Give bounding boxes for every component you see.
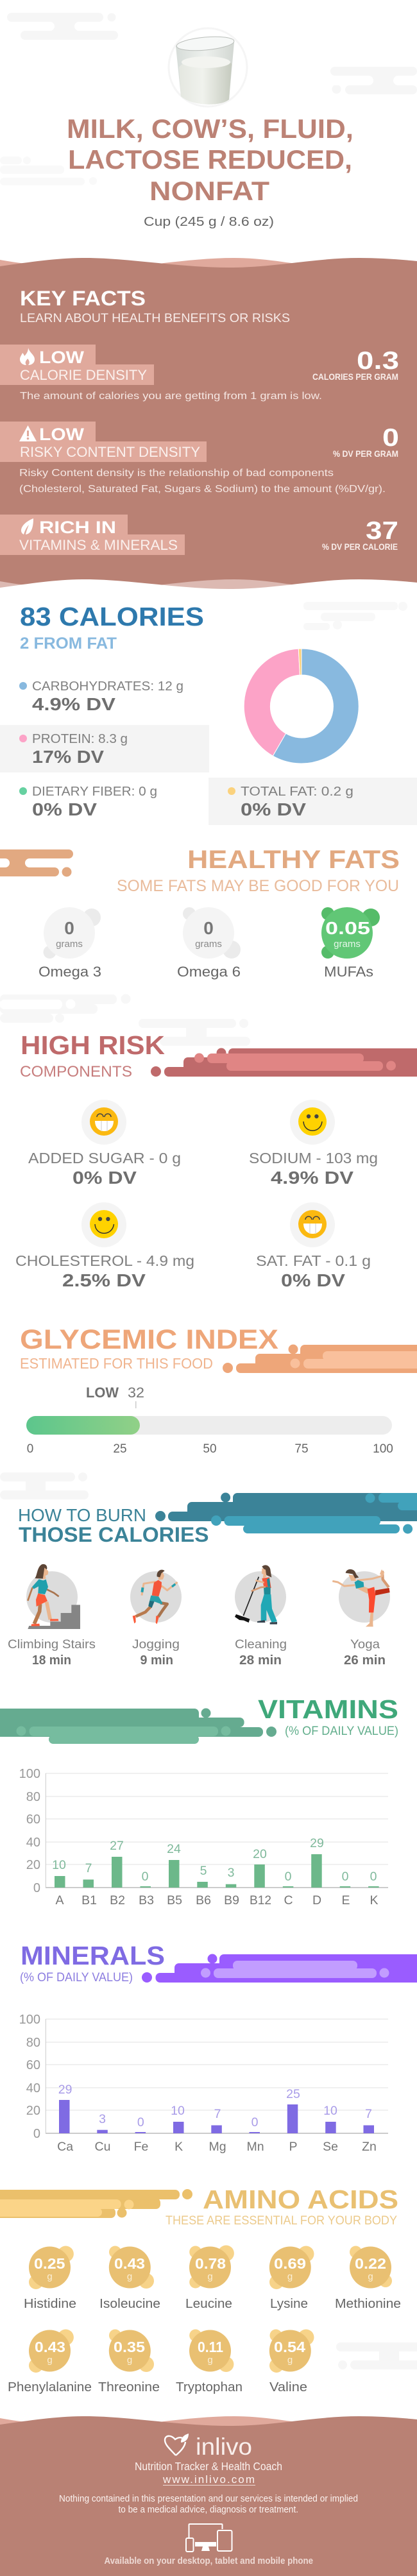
amino acid: valine: g xyxy=(287,2355,293,2366)
panel: calories xyxy=(0,602,417,825)
amino acid: isoleucine: g xyxy=(127,2271,132,2282)
heading: those calories: THOSE CALORIES xyxy=(19,1523,209,1546)
bar chart: minerals: Se xyxy=(323,2140,338,2154)
bar chart: minerals: 0 xyxy=(33,2127,40,2141)
panel: minerals xyxy=(19,1941,417,2154)
amino acid: lysine: 0.69 xyxy=(274,2255,306,2272)
gauge scale: 50 xyxy=(203,1442,217,1456)
fact: calorie density: CALORIE DENSITY xyxy=(20,367,147,383)
bar chart: minerals: 100 xyxy=(19,2013,40,2027)
bubble: omega 6: 0 xyxy=(203,918,214,938)
bar chart: vitamins: B12 xyxy=(250,1893,271,1907)
footer xyxy=(0,2416,417,2576)
subheading: amino acids: THESE ARE ESSENTIAL FOR YOUR BODY xyxy=(166,2214,397,2228)
bar chart: minerals: Cu xyxy=(95,2140,110,2154)
bar chart: minerals: 3 xyxy=(99,2112,106,2126)
gauge scale xyxy=(27,1442,393,1456)
item: sodium: SODIUM - 103 mg xyxy=(249,1150,378,1166)
gauge scale: 25 xyxy=(113,1442,127,1456)
nutrient: dietary fiber xyxy=(19,785,157,819)
heading: vitamins: VITAMINS xyxy=(258,1694,398,1724)
donut chart xyxy=(244,649,359,763)
item: cholesterol: CHOLESTEROL - 4.9 mg xyxy=(15,1252,194,1269)
heading: calories: 83 CALORIES xyxy=(20,602,204,631)
bar chart: minerals: 0 xyxy=(251,2115,259,2129)
bubble: omega 3: 0 xyxy=(64,918,74,938)
activity labels: 26 min xyxy=(344,1653,386,1668)
item: cholesterol: 2.5% DV xyxy=(62,1270,146,1290)
amino acid: valine: 0.54 xyxy=(274,2339,305,2355)
fact: rich in vitamins xyxy=(0,515,398,555)
bar chart: vitamins: 27 xyxy=(110,1839,124,1853)
fact: calorie density: 0.3 xyxy=(357,347,399,375)
bar chart: minerals: Mn xyxy=(246,2140,264,2154)
background clouds xyxy=(0,994,250,1046)
activity labels: 9 min xyxy=(140,1653,173,1668)
gauge bar xyxy=(26,1416,392,1435)
bar chart: vitamins: A xyxy=(55,1893,64,1907)
activity: jogging xyxy=(130,1570,182,1624)
bar chart: minerals: 29 xyxy=(58,2083,72,2097)
fact: risky content density: RISKY CONTENT DENSITY xyxy=(20,444,200,460)
item: saturated fat xyxy=(256,1202,371,1290)
amino acid: tryptophan xyxy=(176,2329,243,2394)
activity labels: 28 min xyxy=(239,1653,282,1668)
panel: high risk components xyxy=(0,994,417,1290)
activity labels: Yoga xyxy=(350,1638,380,1651)
bar chart: vitamins: D xyxy=(312,1893,321,1907)
fact: rich in vitamins: VITAMINS & MINERALS xyxy=(19,537,178,553)
nutrient: total fat: TOTAL FAT: 0.2 g xyxy=(241,785,353,799)
bubble: omega 6: grams xyxy=(195,939,222,950)
amino acid: leucine: Leucine xyxy=(185,2297,232,2311)
activity: yoga xyxy=(332,1569,390,1626)
fact: calorie density xyxy=(0,345,399,402)
subheading: minerals: (% OF DAILY VALUE) xyxy=(20,1971,133,1984)
bar chart: minerals: 7 xyxy=(365,2107,372,2121)
bar chart: vitamins: 3 xyxy=(228,1866,234,1880)
bar chart: vitamins: B2 xyxy=(110,1893,125,1907)
bar chart: vitamins: 0 xyxy=(285,1870,292,1884)
amino acid: valine xyxy=(269,2329,314,2394)
subheading: healthy fats: SOME FATS MAY BE GOOD FOR YOU xyxy=(117,877,399,895)
activity: cleaning xyxy=(235,1565,286,1625)
nutrient: carbohydrates: 4.9% DV xyxy=(32,694,115,714)
background cloud xyxy=(303,602,407,630)
amino acid: histidine xyxy=(24,2246,76,2311)
item: added sugar: ADDED SUGAR - 0 g xyxy=(28,1150,181,1166)
amino acid: leucine: g xyxy=(207,2271,213,2282)
bar chart: minerals: 10 xyxy=(171,2104,185,2118)
item: saturated fat: 0% DV xyxy=(281,1270,345,1290)
disclaimer: to be a medical advice, diagnosis or treatment. xyxy=(118,2505,298,2515)
icon: leaf xyxy=(21,518,33,534)
icon: warning triangle xyxy=(19,425,37,441)
decoration: streak xyxy=(0,1708,277,1744)
bar chart: minerals: Zn xyxy=(362,2140,377,2154)
bar chart: vitamins: 20 xyxy=(26,1858,40,1872)
fact: risky content density: % DV PER GRAM xyxy=(333,448,398,459)
bar chart: vitamins xyxy=(19,1767,388,1907)
fact: rich in vitamins: RICH IN xyxy=(39,518,116,537)
decoration: streak xyxy=(151,1048,417,1077)
background cloud xyxy=(336,2342,417,2369)
amino acid: isoleucine xyxy=(99,2246,160,2311)
bar chart: minerals: 25 xyxy=(286,2087,300,2101)
item: added sugar: 0% DV xyxy=(72,1168,137,1188)
gauge scale: 0 xyxy=(27,1442,33,1456)
amino acid: methionine: g xyxy=(368,2271,373,2282)
serving size: Cup (245 g / 8.6 oz) xyxy=(144,215,274,229)
amino acid: valine: Valine xyxy=(269,2380,307,2394)
bar chart: minerals: Ca xyxy=(57,2140,73,2154)
panel: amino acids xyxy=(0,2185,417,2394)
logo: heart and leaf xyxy=(165,2434,189,2455)
disclaimer xyxy=(59,2494,358,2515)
heading: glycemic index: GLYCEMIC INDEX xyxy=(20,1324,278,1355)
heading: key facts: KEY FACTS xyxy=(20,287,146,310)
amino acid: isoleucine: Isoleucine xyxy=(99,2297,160,2311)
nutrient: protein: 17% DV xyxy=(32,747,104,767)
decoration: streak xyxy=(223,1345,417,1373)
activity labels: 18 min xyxy=(32,1653,71,1668)
item: cholesterol xyxy=(15,1202,194,1290)
amino acid: threonine: 0.35 xyxy=(114,2339,145,2355)
nutrient: protein: PROTEIN: 8.3 g xyxy=(32,732,128,746)
heading: how to burn: HOW TO BURN xyxy=(18,1505,146,1525)
amino acid: methionine: 0.22 xyxy=(355,2255,386,2272)
bar chart: vitamins: 0 xyxy=(142,1870,149,1884)
nutrient: dietary fiber: DIETARY FIBER: 0 g xyxy=(32,785,157,799)
gauge value label xyxy=(86,1385,144,1408)
bar chart: vitamins: 29 xyxy=(310,1836,324,1850)
amino acid: isoleucine: 0.43 xyxy=(114,2255,145,2272)
amino acid: methionine: Methionine xyxy=(335,2297,401,2311)
subheading: from fat: 2 FROM FAT xyxy=(20,635,117,653)
subheading: key facts: LEARN ABOUT HEALTH BENEFITS OR RISKS xyxy=(20,312,290,325)
bar chart: vitamins: 7 xyxy=(85,1861,92,1875)
bubble: mufas: grams xyxy=(334,939,361,950)
bubble: mufas: MUFAs xyxy=(324,964,373,980)
gauge scale: 100 xyxy=(373,1442,393,1456)
website link: www.inlivo.com xyxy=(162,2473,255,2486)
bar chart: vitamins: B6 xyxy=(196,1893,211,1907)
fact: calorie density: The amount of calories you are getting from 1 gram is low. xyxy=(20,391,322,402)
bar chart: minerals: 60 xyxy=(26,2058,40,2072)
tagline: Nutrition Tracker & Health Coach xyxy=(135,2460,282,2473)
fact: rich in vitamins: % DV PER CALORIE xyxy=(322,542,398,552)
fact: rich in vitamins: 37 xyxy=(366,517,398,545)
bar chart: vitamins: 0 xyxy=(342,1870,349,1884)
bar chart: minerals: 10 xyxy=(323,2104,337,2118)
gauge value label: LOW xyxy=(86,1385,119,1401)
activity labels: Jogging xyxy=(132,1638,180,1651)
bar chart: vitamins: 10 xyxy=(52,1858,66,1872)
title: MILK, COW’S, FLUID, xyxy=(67,114,353,144)
subheading: components: COMPONENTS xyxy=(20,1063,132,1080)
bar chart: vitamins: 80 xyxy=(26,1790,40,1804)
amino acid: tryptophan: Tryptophan xyxy=(176,2380,243,2394)
icon: devices xyxy=(186,2524,232,2552)
bar chart: minerals: 40 xyxy=(26,2081,40,2095)
title: NONFAT xyxy=(149,176,269,206)
amino acid: threonine: g xyxy=(127,2355,132,2366)
panel: key facts xyxy=(0,258,417,603)
activity labels: Climbing Stairs xyxy=(8,1638,96,1651)
item: added sugar xyxy=(28,1100,181,1188)
nutrient: carbohydrates: CARBOHYDRATES: 12 g xyxy=(32,679,183,694)
bubble: omega 6: Omega 6 xyxy=(177,964,241,980)
amino acid: lysine: g xyxy=(287,2271,293,2282)
amino acid: threonine xyxy=(98,2329,160,2394)
bar chart: vitamins: B3 xyxy=(139,1893,154,1907)
heading: healthy fats: HEALTHY FATS xyxy=(187,846,400,874)
bubble: mufas: 0.05 xyxy=(325,918,370,938)
amino acid: methionine xyxy=(335,2246,401,2311)
activity labels xyxy=(8,1638,386,1668)
bar chart: vitamins: 100 xyxy=(19,1767,40,1781)
amino acid: tryptophan: g xyxy=(207,2355,213,2366)
title: LACTOSE REDUCED, xyxy=(68,144,352,175)
panel: healthy fats xyxy=(0,846,400,980)
bar chart: vitamins: 0 xyxy=(33,1881,40,1895)
nutrient: total fat: 0% DV xyxy=(241,799,306,819)
amino acid: phenylalanine xyxy=(8,2329,92,2394)
fact: risky content density xyxy=(0,422,399,495)
bar chart: vitamins: B5 xyxy=(167,1893,182,1907)
heading: amino acids: AMINO ACIDS xyxy=(203,2185,398,2214)
decoration: streak xyxy=(0,849,73,876)
bar chart: vitamins: 40 xyxy=(26,1836,40,1850)
item: sodium xyxy=(249,1100,378,1188)
logo wordmark: inlivo xyxy=(196,2434,252,2460)
bar chart: vitamins: 60 xyxy=(26,1813,40,1827)
bar chart: vitamins: B1 xyxy=(81,1893,97,1907)
heading: high risk: HIGH RISK xyxy=(21,1030,165,1060)
bubble: omega 6 xyxy=(177,907,241,980)
nutrient: protein xyxy=(0,725,209,772)
amino acid: phenylalanine: Phenylalanine xyxy=(8,2380,92,2394)
bar chart: minerals: 7 xyxy=(214,2107,221,2121)
bar chart: vitamins: 24 xyxy=(167,1842,181,1856)
bar chart: vitamins: E xyxy=(341,1893,350,1907)
bubble: omega 3: grams xyxy=(56,939,83,950)
fact: risky content density: Risky Content density is the relationship of bad components xyxy=(19,468,334,479)
subheading: vitamins: (% OF DAILY VALUE) xyxy=(285,1725,398,1738)
fact: risky content density: LOW xyxy=(39,425,85,444)
icon: flame xyxy=(20,348,35,365)
bar chart: vitamins: C xyxy=(284,1893,293,1907)
bar chart: minerals: Fe xyxy=(134,2140,148,2154)
title xyxy=(67,114,353,206)
panel: glycemic index xyxy=(20,1324,417,1456)
panel: burn calories xyxy=(0,1472,417,1668)
bar chart: vitamins: 5 xyxy=(200,1864,207,1878)
fact: risky content density: 0 xyxy=(382,424,399,452)
amino acid: histidine: Histidine xyxy=(24,2297,76,2311)
bar chart: vitamins: 0 xyxy=(370,1870,377,1884)
gauge value label: 32 xyxy=(128,1385,144,1401)
fact: calorie density: CALORIES PER GRAM xyxy=(312,371,398,382)
subheading: glycemic index: ESTIMATED FOR THIS FOOD xyxy=(20,1355,213,1372)
gauge scale: 75 xyxy=(294,1442,309,1456)
panel: vitamins xyxy=(0,1694,398,1907)
amino acid: phenylalanine: g xyxy=(47,2355,53,2366)
bubble: mufas xyxy=(321,907,380,980)
decoration: streak xyxy=(142,1954,417,1983)
fact: risky content density: (Cholesterol, Saturated Fat, Sugars & Sodium) to the amount (%DV/gr). xyxy=(19,484,386,495)
fact: calorie density: LOW xyxy=(39,348,85,367)
disclaimer: Nothing contained in this presentation and our services is intended or implied xyxy=(59,2494,358,2504)
activity labels: Cleaning xyxy=(235,1638,287,1651)
amino acid: histidine: g xyxy=(47,2271,53,2282)
nutrient: total fat xyxy=(208,778,417,825)
amino acid: phenylalanine: 0.43 xyxy=(35,2339,65,2355)
amino acid: leucine: 0.78 xyxy=(195,2255,226,2272)
bubble: omega 3: Omega 3 xyxy=(38,964,101,980)
bar chart: vitamins: 20 xyxy=(253,1847,267,1861)
bar chart: minerals: Mg xyxy=(208,2140,226,2154)
decoration: streak xyxy=(155,1492,417,1533)
item: saturated fat: SAT. FAT - 0.1 g xyxy=(256,1252,371,1269)
bar chart: minerals: 0 xyxy=(137,2115,144,2129)
amino acid: histidine: 0.25 xyxy=(34,2255,65,2272)
nutrient: carbohydrates xyxy=(19,679,183,714)
activity: climbing stairs xyxy=(26,1564,80,1629)
heading: minerals: MINERALS xyxy=(21,1941,165,1970)
bar chart: minerals: P xyxy=(289,2140,298,2154)
amino acid: leucine xyxy=(185,2246,234,2311)
bar chart: minerals xyxy=(19,2013,388,2154)
bar chart: minerals: 80 xyxy=(26,2036,40,2050)
nutrient: dietary fiber: 0% DV xyxy=(32,799,97,819)
background clouds: top xyxy=(0,13,417,185)
amino acid: tryptophan: 0.11 xyxy=(198,2339,223,2355)
availability note: Available on your desktop, tablet and mobile phone xyxy=(104,2556,313,2566)
food image: glass of milk xyxy=(169,28,247,107)
bar chart: minerals: K xyxy=(174,2140,183,2154)
bar chart: vitamins: B9 xyxy=(224,1893,239,1907)
decoration: streak xyxy=(0,2189,192,2218)
bar chart: minerals: 20 xyxy=(26,2104,40,2118)
bubble: omega 3 xyxy=(38,907,101,980)
amino acid: lysine xyxy=(269,2246,314,2311)
amino acid: threonine: Threonine xyxy=(98,2380,160,2394)
amino acid: lysine: Lysine xyxy=(270,2297,308,2311)
background cloud xyxy=(0,1472,89,1499)
bar chart: vitamins: K xyxy=(370,1893,379,1907)
item: sodium: 4.9% DV xyxy=(271,1168,353,1188)
